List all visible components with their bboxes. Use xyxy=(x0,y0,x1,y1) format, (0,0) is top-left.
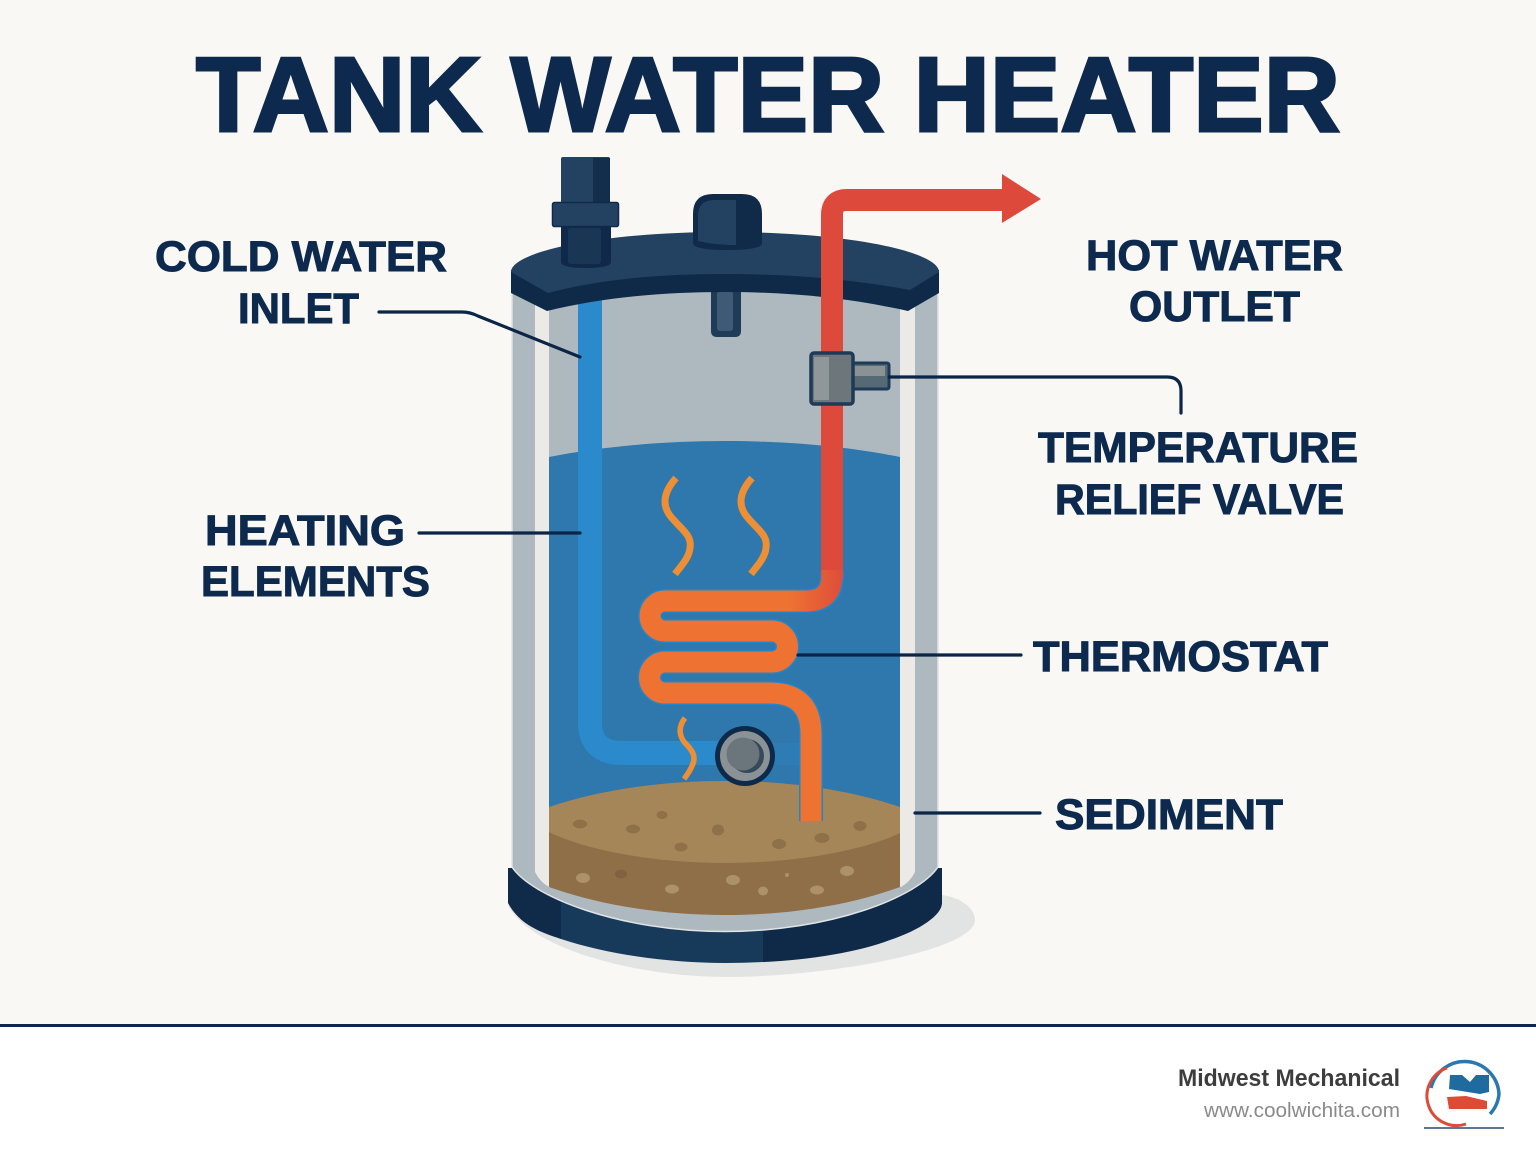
footer panel xyxy=(0,1024,1536,1154)
leader: sediment xyxy=(915,811,1040,815)
heating coil top segment xyxy=(760,570,832,601)
label: cold water inlet xyxy=(155,233,447,333)
label: temperature relief valve xyxy=(1038,424,1358,524)
logo red mark xyxy=(1447,1096,1487,1109)
outlet arrowhead xyxy=(1002,174,1041,223)
relief valve xyxy=(811,353,889,404)
title: TANK WATER HEATER xyxy=(196,36,1340,154)
outlet pipe xyxy=(832,200,1005,578)
company website: www.coolwichita.com xyxy=(1203,1100,1400,1122)
label: temperature relief valve: TEMPERATURE xyxy=(1038,424,1358,472)
floor shadow xyxy=(508,895,975,977)
logo blue arc xyxy=(1431,1062,1499,1114)
label: heating elements: ELEMENTS xyxy=(201,558,430,606)
fitting lower face xyxy=(568,228,601,264)
knob face xyxy=(698,200,736,245)
fitting upper xyxy=(561,157,610,207)
stub highlight xyxy=(717,291,733,331)
valve port highlight xyxy=(853,366,885,376)
label: hot water outlet: HOT WATER xyxy=(1086,232,1343,280)
stub body xyxy=(711,285,741,337)
label: heating elements xyxy=(201,507,430,606)
tank lid xyxy=(511,232,939,311)
leader: thermostat xyxy=(798,653,1021,657)
heat wave left xyxy=(665,478,690,574)
label: heating elements: HEATING xyxy=(205,507,405,555)
valve side port xyxy=(851,363,889,389)
top knob xyxy=(693,194,762,250)
valve body xyxy=(811,353,853,404)
sediment top surface xyxy=(549,781,900,863)
label: temperature relief valve: RELIEF VALVE xyxy=(1055,476,1344,524)
tank outer shell xyxy=(512,270,938,932)
sediment body xyxy=(549,781,900,915)
label: hot water outlet xyxy=(1086,232,1343,331)
tank interior xyxy=(549,285,900,845)
footer rule xyxy=(0,1024,1536,1027)
valve crescent xyxy=(730,739,764,773)
valve face xyxy=(720,731,770,781)
fitting upper shade xyxy=(593,158,610,206)
label: cold water inlet: COLD WATER xyxy=(155,233,447,281)
heat wave small xyxy=(680,718,694,779)
cold water dip tube xyxy=(590,300,735,753)
sediment specks xyxy=(573,811,866,896)
heating coil xyxy=(650,601,811,821)
water xyxy=(549,441,900,840)
label: thermostat: THERMOSTAT xyxy=(1033,633,1328,681)
label: cold water inlet: INLET xyxy=(238,285,359,333)
company name: Midwest Mechanical xyxy=(1178,1065,1400,1092)
leader: cold water inlet xyxy=(379,312,580,357)
footer xyxy=(0,1024,1536,1154)
fitting lower xyxy=(561,222,611,268)
lid top surface xyxy=(511,232,939,293)
hot water outlet pipe with arrow xyxy=(832,174,1041,578)
cold water inlet fitting xyxy=(552,157,618,268)
fitting collar xyxy=(552,202,618,226)
leader: temperature relief valve xyxy=(889,377,1181,413)
water heater diagram xyxy=(379,157,1181,977)
label: hot water outlet: OUTLET xyxy=(1129,283,1300,331)
faint cold pipe behind valve xyxy=(760,743,802,765)
sediment layer xyxy=(549,781,900,915)
heat wave right xyxy=(741,478,766,574)
anode stub xyxy=(711,285,741,337)
knob body xyxy=(693,194,762,250)
logo underline xyxy=(1424,1127,1504,1129)
thermostat coil halo xyxy=(650,572,832,821)
label: sediment: SEDIMENT xyxy=(1055,791,1283,839)
gas valve xyxy=(715,726,775,786)
valve body highlight xyxy=(814,357,829,400)
valve ring xyxy=(715,726,775,786)
valve center xyxy=(726,738,760,770)
leader lines xyxy=(379,312,1181,813)
company logo xyxy=(1424,1062,1504,1129)
logo blue mark xyxy=(1449,1075,1489,1094)
leader: heating elements xyxy=(419,531,580,535)
tank base ring xyxy=(508,868,942,963)
tank insulation strip xyxy=(535,295,915,887)
logo red arc xyxy=(1427,1068,1466,1126)
lid front edge xyxy=(511,270,939,311)
